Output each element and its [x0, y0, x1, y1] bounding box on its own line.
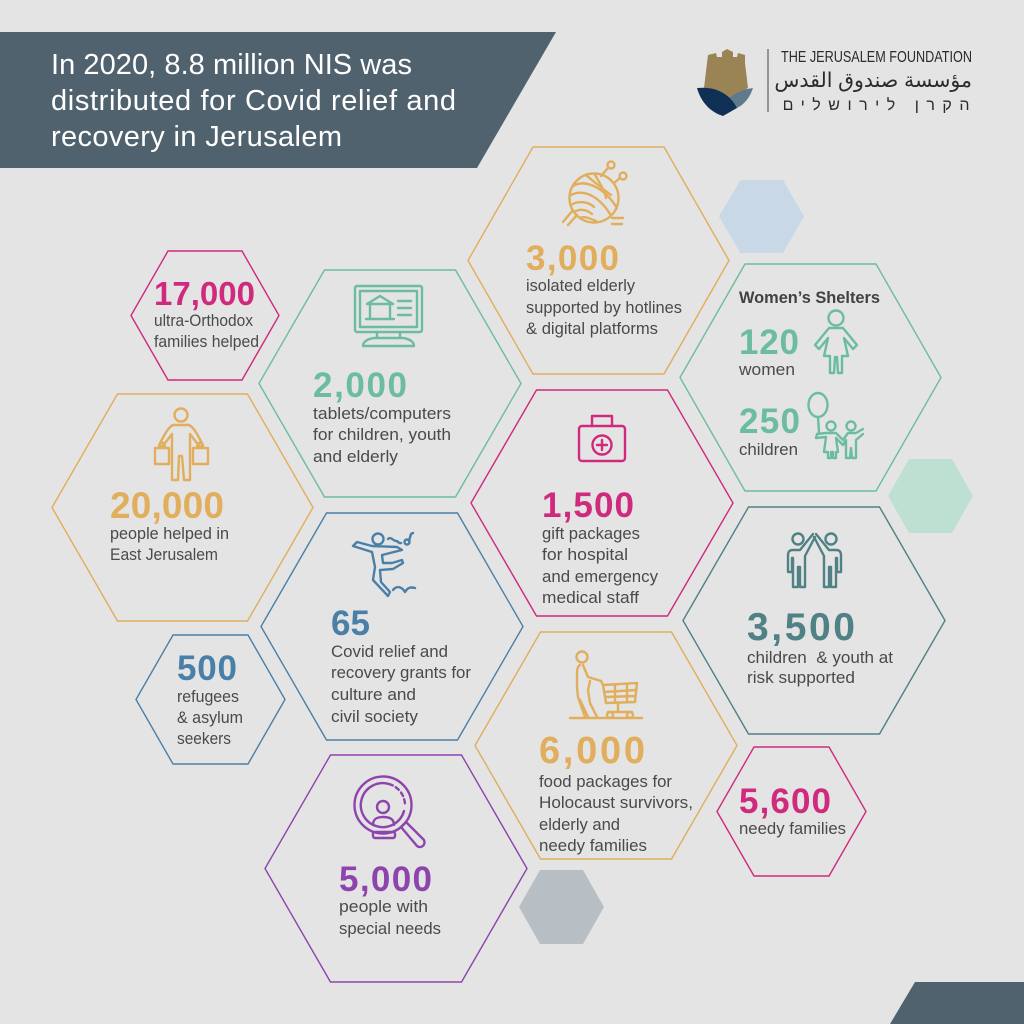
panel: women's shelters: children: [739, 440, 798, 459]
panel: hospital gift packages: for hospital: [542, 545, 628, 564]
panel: East Jerusalem: 20,000: [110, 485, 224, 526]
title banner: In 2020, 8.8 million NIS was: [51, 49, 412, 81]
panel: food packages: food packages for: [539, 772, 672, 791]
panel: special needs: [265, 755, 527, 982]
panel: culture grants: Covid relief and: [331, 642, 448, 661]
icon: person with shopping bags: [155, 408, 208, 480]
panel: food packages: 6,000: [539, 730, 645, 772]
panel: isolated elderly: isolated elderly: [526, 276, 635, 295]
panel: needy families: 5,600: [739, 782, 831, 821]
panel: isolated elderly: 3,000: [526, 239, 619, 278]
panel: children and youth at risk: [683, 507, 945, 734]
panel: culture grants: [261, 513, 523, 740]
panel: hospital gift packages: 1,500: [542, 486, 634, 525]
panel: refugees: refugees: [177, 687, 239, 706]
icon: dancing figure: [353, 533, 415, 596]
panel: special needs: special needs: [339, 919, 441, 938]
panel: food packages: needy families: [539, 836, 647, 855]
icon: yarn ball: [563, 162, 626, 225]
panel: isolated elderly: & digital platforms: [526, 319, 658, 338]
panel: needy families: [717, 747, 866, 876]
panel: women's shelters: [680, 264, 941, 491]
panel: ultra-Orthodox families: [131, 251, 279, 380]
panel: food packages: [475, 632, 737, 859]
panel: ultra-Orthodox families: 17,000: [154, 275, 255, 312]
panel: hospital gift packages: gift packages: [542, 524, 640, 543]
icon: two people high five: [788, 534, 841, 587]
icon: computer monitor: [355, 286, 422, 346]
title banner: recovery in Jerusalem: [51, 121, 342, 153]
panel: isolated elderly: supported by hotlines: [526, 298, 682, 317]
panel: ultra-Orthodox families: families helped: [154, 332, 259, 351]
panel: tablets and computers: and elderly: [313, 447, 399, 466]
panel: refugees: & asylum: [177, 708, 243, 727]
corner decoration: [890, 982, 1024, 1024]
panel: food packages: elderly and: [539, 815, 620, 834]
logo: The Jerusalem Foundation: הקרן לירושלים: [783, 96, 977, 114]
panel: special needs: 5,000: [339, 860, 432, 899]
panel: hospital gift packages: medical staff: [542, 588, 639, 607]
panel: East Jerusalem: people helped in: [110, 524, 229, 543]
panel: tablets and computers: for children, youth: [313, 425, 451, 444]
panel: culture grants: culture and: [331, 685, 416, 704]
panel: food packages: Holocaust survivors,: [539, 793, 693, 812]
panel: children and youth at risk: 3,500: [747, 606, 855, 649]
panel: women's shelters: women: [738, 360, 795, 379]
panel: women's shelters: 120: [739, 323, 799, 362]
logo: The Jerusalem Foundation: [697, 49, 977, 116]
icon: children with balloon: [808, 393, 863, 458]
panel: special needs: people with: [339, 897, 428, 916]
title banner: [0, 32, 556, 168]
panel: refugees: [136, 635, 285, 764]
icon: woman: [815, 310, 857, 373]
heading: Women's Shelters: Women’s Shelters: [739, 289, 880, 307]
panel: isolated elderly: [468, 147, 729, 374]
panel: culture grants: 65: [331, 604, 370, 643]
panel: children and youth at risk: risk supported: [747, 668, 855, 687]
panel: refugees: seekers: [177, 729, 231, 748]
panel: East Jerusalem: [52, 394, 313, 621]
panel: refugees: 500: [177, 649, 237, 688]
panel: tablets and computers: [259, 270, 521, 497]
icon: first aid kit: [579, 416, 625, 461]
panel: culture grants: recovery grants for: [331, 663, 471, 682]
panel: needy families: needy families: [739, 819, 846, 838]
panel: tablets and computers: 2,000: [313, 366, 407, 405]
logo: The Jerusalem Foundation: مؤسسة صندوق القدس: [774, 69, 972, 92]
panel: ultra-Orthodox families: ultra-Orthodox: [154, 311, 253, 330]
title banner: distributed for Covid relief and: [51, 85, 456, 117]
panel: East Jerusalem: East Jerusalem: [110, 545, 218, 564]
decorative filled hexagons: [519, 180, 973, 944]
panel: hospital gift packages: [471, 390, 733, 616]
panel: children and youth at risk: children & youth at: [747, 648, 893, 667]
panel: women's shelters: 250: [739, 402, 800, 441]
icon: magnifying glass with person: [354, 776, 424, 847]
logo: The Jerusalem Foundation: THE JERUSALEM FOUNDATION: [781, 49, 972, 66]
panel: culture grants: civil society: [331, 707, 419, 726]
panel: hospital gift packages: and emergency: [542, 567, 658, 586]
panel: tablets and computers: tablets/computers: [313, 404, 451, 423]
icon: person with shopping cart: [570, 652, 642, 718]
